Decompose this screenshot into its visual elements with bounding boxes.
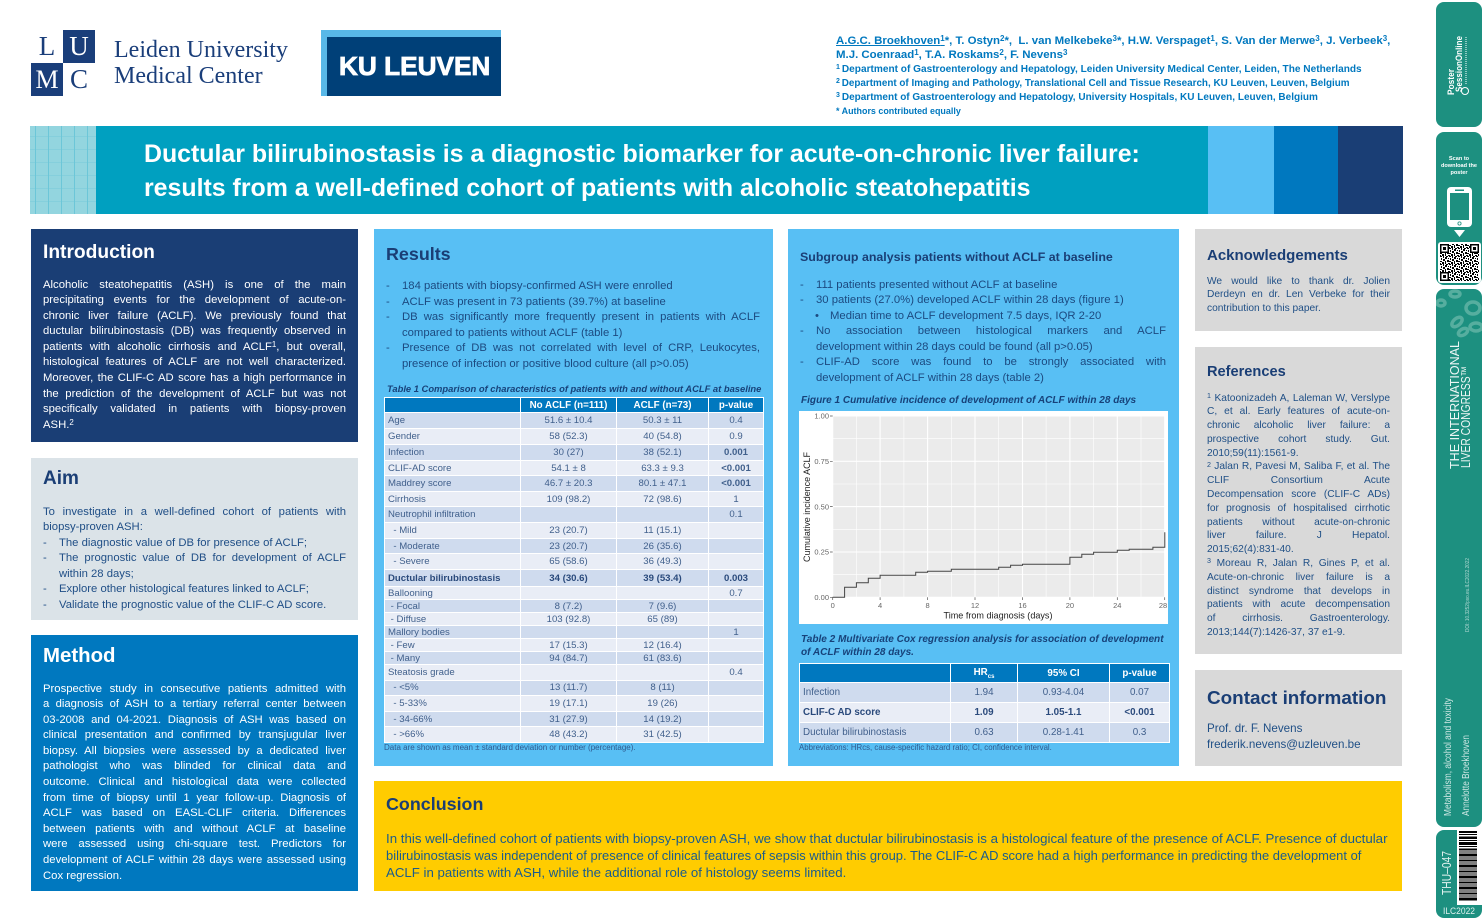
logo: LUMC: Leiden University <box>114 37 288 63</box>
panel: acknowledgements <box>1195 229 1402 331</box>
text: subgroup bullets: - <box>800 356 804 368</box>
text: reference list: for prognosis of hospitalised cirrhotic <box>1207 503 1390 514</box>
sidebar block: congress and session: LIVER CONGRESS™ <box>1459 366 1473 468</box>
text: results bullets: compared to patients without ACLF (table 1) <box>402 327 622 339</box>
sidebar block: congress and session: Annelotte Broekhoven <box>1461 735 1472 816</box>
text: method body: were assessed using chi-square test. Predictors for <box>43 838 346 850</box>
axis tick labels: 4 <box>878 601 882 610</box>
table 1: 0.9 <box>729 431 743 442</box>
sidebar: congress strip <box>1436 2 1482 918</box>
table 1: Ballooning <box>388 588 433 599</box>
panel: contact information <box>1195 670 1402 766</box>
table 2: Ductular bilirubinostasis <box>803 727 906 738</box>
panel: references <box>1195 347 1402 654</box>
panel: conclusion <box>374 781 1402 891</box>
text: results bullets: - <box>386 311 390 323</box>
text: results bullets: - <box>386 280 390 292</box>
authors and affiliations: 3 Department of Gastroenterology and Hepatology, University Hospitals, KU Leuven, Leuven, Belgium <box>836 92 1318 103</box>
table 2: 95% CI <box>1047 668 1080 678</box>
text: reference list: chronic alcoholic liver failure: a <box>1207 420 1390 431</box>
authors and affiliations: 1 Department of Gastroenterology and Hepatology, Leiden University Medical Center, Leiden, The Netherlands <box>836 64 1362 75</box>
text: aim body: Explore other histological features linked to ACLF; <box>59 583 309 595</box>
heading: results: Results <box>386 244 451 264</box>
text: method body: Cox regression. <box>43 870 122 882</box>
heading: subgroup analysis: Subgroup analysis patients without ACLF at baseline <box>800 250 1113 264</box>
caption: table 1: Table 1 Comparison of characteristics of patients with and without ACLF at baseline <box>387 383 761 394</box>
table 1: 1 <box>733 494 739 505</box>
logo: LUMC: L <box>39 31 55 61</box>
sidebar block: poster number and barcode <box>1436 830 1482 918</box>
text: reference list: of cirrhosis. Gastroenterology. <box>1207 613 1390 624</box>
text: aim body: - <box>43 599 47 611</box>
table 1: 103 (92.8) <box>547 614 590 625</box>
text: method body: outcome. Clinical and histological data were collected <box>43 776 346 788</box>
table 1: 11 (15.1) <box>644 525 681 536</box>
table 1: No ACLF (n=111) <box>530 400 607 411</box>
panel: introduction <box>31 229 358 442</box>
icon: down arrow <box>1454 230 1465 237</box>
axis tick labels: 0.00 <box>814 593 829 602</box>
caption: table 2: Table 2 Multivariate Cox regression analysis for association of development <box>801 634 1164 645</box>
table 1: 63.3 ± 9.3 <box>641 463 684 474</box>
text: method body: development of ACLF within 28 days were assessed using <box>43 854 346 866</box>
text: aim body: biopsy-proven ASH: <box>43 521 143 533</box>
table 1: Infection <box>388 447 424 458</box>
text: method body: biopsy. All biopsies were assessed by a dedicated liver <box>43 745 346 757</box>
table 2: 0.28-1.41 <box>1043 727 1084 738</box>
text: conclusion body <box>386 830 1388 880</box>
table 1: 30 (27) <box>553 447 584 458</box>
axis tick labels: 0.75 <box>814 457 829 466</box>
text: subgroup bullets: • <box>815 310 819 322</box>
heading: references: References <box>1207 364 1286 380</box>
barcode <box>1459 831 1477 900</box>
table 1: Neutrophil infiltration <box>388 509 475 520</box>
text: results bullets: presence of infection or positive blood culture (all p>0.05) <box>402 358 689 370</box>
table 1: - Focal <box>391 601 420 612</box>
table 1: p-value <box>719 400 753 411</box>
table 1: 65 (58.6) <box>549 556 588 567</box>
heading: contact information: Contact information <box>1207 688 1386 709</box>
QR code <box>1438 242 1481 283</box>
table 1: 72 (98.6) <box>643 494 682 505</box>
chart: cumulative incidence <box>799 411 1168 624</box>
text: method body: Prospective study in consecutive patients admitted with <box>43 682 346 694</box>
text: reference list: 2013;144(7):1426-37, 37 e1-9. <box>1207 627 1345 638</box>
axis tick labels <box>814 412 1167 610</box>
text: subgroup bullets: 111 patients presented without ACLF at baseline <box>816 278 1057 290</box>
text: reference list: Decompensation score (CLIF-C ADs) <box>1207 489 1390 500</box>
table 1: Cirrhosis <box>388 494 426 505</box>
text: method body: from time of biopsy until 1 year follow-up. Diagnosis of <box>43 792 346 804</box>
axis tick labels: 0.50 <box>814 502 829 511</box>
text: results bullets: DB was significantly more frequently present in patients with ACLF <box>402 311 760 323</box>
text: acknowledgements body: contribution to this paper. <box>1207 303 1321 314</box>
table 1: 19 (17.1) <box>549 698 588 709</box>
table 1: - Mild <box>393 525 417 536</box>
sidebar block: congress and session <box>1436 289 1482 827</box>
heading: acknowledgements: Acknowledgements <box>1207 247 1348 264</box>
heading: introduction: Introduction <box>43 242 155 263</box>
sidebar block: poster session online <box>1436 2 1482 127</box>
sidebar block: poster session online: Poster <box>1446 69 1456 95</box>
text: results bullets: - <box>386 342 390 354</box>
table 1: - Moderate <box>393 541 440 552</box>
logo: LUMC: M <box>35 65 59 94</box>
text: reference list: patients without acute-on-chronic <box>1207 517 1390 528</box>
text: introduction body: Alcoholic steatohepatitis (ASH) is one of the main <box>43 278 346 290</box>
table 1: <0.001 <box>721 463 751 474</box>
text: method body: between patients with and without ACLF at baseline <box>43 823 346 835</box>
text: reference list: prospective cohort study. Gut. <box>1207 434 1390 445</box>
axis tick labels: 1.00 <box>814 412 829 421</box>
text: aim body: - <box>43 583 47 595</box>
axis tick labels: 16 <box>1018 601 1027 610</box>
text: subgroup bullets: - <box>800 325 804 337</box>
axis tick labels: 28 <box>1159 601 1167 610</box>
table 1: - <5% <box>393 682 419 693</box>
authors and affiliations: M.J. Coenraad1, T.A. Roskams2, F. Nevens3 <box>836 48 1067 61</box>
text: acknowledgements body: We would like to thank dr. Jolien <box>1207 276 1390 286</box>
sidebar block: scan to download: Scan to <box>1449 156 1470 162</box>
logo: LUMC <box>31 30 288 96</box>
axis tick labels: 12 <box>971 601 979 610</box>
table 1: Steatosis grade <box>388 667 455 678</box>
sidebar block: scan to download: poster <box>1450 170 1468 176</box>
table 1: 39 (53.4) <box>643 573 682 584</box>
table 1: 38 (52.1) <box>643 447 682 458</box>
sidebar block: scan to download: download the <box>1441 163 1477 169</box>
axis tick labels: 0 <box>831 601 835 610</box>
table 1: 23 (20.7) <box>549 525 588 536</box>
text: introduction body: Moreover, the CLIF-C AD score has a high performance in <box>43 372 346 384</box>
table 2: p-value <box>1122 668 1157 678</box>
text: reference list: patients with acute decompensation <box>1207 599 1390 610</box>
axis tick labels: 20 <box>1066 601 1074 610</box>
logo: KU Leuven <box>321 30 501 96</box>
sidebar block: scan to download <box>1436 132 1482 285</box>
sidebar block: congress and session: THE INTERNATIONAL <box>1448 341 1462 469</box>
table 1: - Diffuse <box>391 614 426 625</box>
text: subgroup bullets: No association between histological markers and ACLF <box>816 325 1166 337</box>
text: introduction body: ductular bilirubinostasis (DB) was frequently observed in <box>43 325 346 337</box>
table 2: Infection <box>803 687 840 698</box>
text: acknowledgements body <box>1207 276 1390 314</box>
table 1: CLIF-AD score <box>388 463 451 474</box>
text: introduction body <box>43 278 346 431</box>
authors and affiliations: * Authors contributed equally <box>836 106 961 116</box>
text: reference list: Acute-on-chronic liver failure is a <box>1207 572 1390 583</box>
panel: subgroup analysis <box>788 229 1179 766</box>
logo: KU Leuven: KU LEUVEN <box>339 51 490 81</box>
text: subgroup bullets: CLIF-AD score was found to be strongly associated with <box>816 356 1166 368</box>
table 1: 7 (9.6) <box>649 601 676 612</box>
text: results bullets: 184 patients with biopsy-confirmed ASH were enrolled <box>402 280 673 292</box>
text: subgroup bullets: - <box>800 278 804 290</box>
table 1: 31 (27.9) <box>549 714 588 725</box>
text: results bullets: - <box>386 296 390 308</box>
text: conclusion body: ACLF in patients with ASH, while the additional role of histology seems limited. <box>386 865 846 880</box>
table 1: 1 <box>733 627 739 638</box>
caption: table 2 <box>801 634 1164 658</box>
table 1: 0.4 <box>729 415 743 426</box>
text: subgroup bullets: Median time to ACLF development 7.5 days, IQR 2-20 <box>830 310 1101 322</box>
table 1: 34 (30.6) <box>549 573 588 584</box>
table 2: 0.63 <box>974 727 994 738</box>
table 1: 26 (35.6) <box>643 541 682 552</box>
footnote: table 1: Data are shown as mean ± standard deviation or number (percentage). <box>384 743 636 752</box>
footnote: table 2: Abbreviations: HRcs, cause-specific hazard ratio; CI, confidence interval. <box>799 743 1052 752</box>
table 1: 80.1 ± 47.1 <box>639 478 686 489</box>
text: reference list: 2010;59(11):1561-9. <box>1207 448 1299 459</box>
table 1: 19 (26) <box>647 698 678 709</box>
text: reference list: 1 Katoonizadeh A, Laleman W, Verslype <box>1207 392 1390 404</box>
table 2: 0.93-4.04 <box>1043 687 1084 698</box>
table 1: - Few <box>391 640 415 651</box>
table 2: HRcs <box>974 667 994 679</box>
text: reference list: 2015;62(4):831-40. <box>1207 544 1294 555</box>
table 2: 1.09 <box>974 707 994 718</box>
heading: aim: Aim <box>43 468 79 489</box>
incidence step curve <box>833 532 1165 597</box>
text: subgroup bullets: - <box>800 294 804 306</box>
authors and affiliations <box>836 34 1390 116</box>
logo: LUMC: U <box>69 31 89 61</box>
table 1: 61 (83.6) <box>643 653 682 664</box>
panel: results <box>374 229 773 766</box>
table 1: 109 (98.2) <box>547 494 590 505</box>
text: introduction body: chronic liver failure (ACLF). We previously found that <box>43 310 346 322</box>
text: method body: ACLF was based on EASL-CLIF criteria. Differences <box>43 807 346 819</box>
sidebar block: congress and session: Metabolism, alcohol and toxicity <box>1443 698 1454 816</box>
table 1: - 34-66% <box>393 714 432 725</box>
text: aim body <box>43 506 346 611</box>
text: contact details: frederik.nevens@uzleuven.be <box>1207 738 1361 751</box>
table 2 <box>799 663 1170 743</box>
text: results bullets: Presence of DB was not correlated with level of CRP, Leukocytes, <box>402 342 760 354</box>
table 1: 0.7 <box>729 588 743 599</box>
text: subgroup bullets: development of ACLF within 28 days (table 2) <box>816 372 1044 384</box>
authors and affiliations: 2 Department of Imaging and Pathology, Translational Cell and Tissue Research, KU Leuven, Leuven, Belgium <box>836 78 1350 89</box>
table 1: 0.003 <box>724 573 748 584</box>
heading: method: Method <box>43 645 115 667</box>
sidebar block: poster number and barcode: THU–047 <box>1439 851 1454 895</box>
table 1: - Many <box>391 653 420 664</box>
chart: cumulative incidence: Cumulative incidence ACLF <box>802 452 812 562</box>
text: method body: clinical presentation and confirmed by transjugular liver <box>43 729 346 741</box>
table 2: 0.07 <box>1130 687 1149 698</box>
table 1: 0.1 <box>729 509 743 520</box>
text: reference list: 3 Moreau R, Jalan R, Gines P, et al. <box>1207 557 1390 569</box>
sidebar block: poster number and barcode: ILC2022 <box>1443 906 1475 916</box>
text: reference list: 2 Jalan R, Pavesi M, Saliba F, et al. The <box>1207 461 1390 472</box>
table 1: Mallory bodies <box>388 627 450 638</box>
table 1: 48 (43.2) <box>549 729 588 740</box>
table 1: 36 (49.3) <box>643 556 682 567</box>
text: subgroup bullets <box>800 278 1166 384</box>
table 2: <0.001 <box>1124 707 1155 718</box>
text: introduction body: precipitating events for the development of acute-on- <box>43 294 346 306</box>
table 1: 94 (84.7) <box>549 653 588 664</box>
panel: method <box>31 635 358 891</box>
table 1: 0.001 <box>724 447 748 458</box>
sidebar block: poster session online: SessionOnline <box>1454 36 1464 92</box>
text: acknowledgements body: Derdeyn en dr. Len Verbeke for their <box>1207 289 1390 300</box>
table 1: 54.1 ± 8 <box>551 463 586 474</box>
caption: table 2: of ACLF within 28 days. <box>801 647 914 658</box>
table 2: CLIF-C AD score <box>803 707 880 718</box>
text: reference list: liver failure. J Hepatol. <box>1207 530 1390 541</box>
text: introduction body: ASH.2 <box>43 418 74 431</box>
table 2: 1.05-1.1 <box>1046 707 1081 718</box>
table 1: Ductular bilirubinostasis <box>388 573 500 584</box>
decorative rings <box>1437 291 1482 337</box>
axis tick labels: 8 <box>926 601 930 610</box>
table 1: 65 (89) <box>647 614 678 625</box>
table 1: 0.4 <box>729 667 743 678</box>
text: contact details <box>1207 722 1361 751</box>
table 1: 50.3 ± 11 <box>643 415 682 426</box>
text: results bullets <box>386 280 760 370</box>
table 1: - 5-33% <box>393 698 427 709</box>
icon: phone <box>1447 187 1472 227</box>
text: reference list: distinct syndrome that develops in <box>1207 586 1390 597</box>
table 1: 12 (16.4) <box>643 640 682 651</box>
text: results bullets: ACLF was present in 73 patients (39.7%) at baseline <box>402 296 666 308</box>
table 1: 17 (15.3) <box>549 640 588 651</box>
text: aim body: The prognostic value of DB for development of ACLF <box>59 552 346 564</box>
text: aim body: The diagnostic value of DB for presence of ACLF; <box>59 537 307 549</box>
table 2: 1.94 <box>974 687 994 698</box>
text: aim body: - <box>43 537 47 549</box>
text: introduction body: histological features of ACLF are not well characterized. <box>43 356 346 368</box>
text: conclusion body: bilirubinostasis was independent of presence of clinical features of sepsis within this group. The CLIF-C AD score had a high performance in predicting the development of <box>386 848 1361 863</box>
table 1: 31 (42.5) <box>643 729 682 740</box>
text: conclusion body: In this well-defined cohort of patients with biopsy-proven ASH, we show that ductular bilirubinostasis is a histological feature of the presence of ACLF. Presence of ductular <box>386 830 1388 846</box>
table 1: 8 (7.2) <box>555 601 582 612</box>
table 1: 13 (11.7) <box>550 682 587 693</box>
table 1 <box>384 397 764 743</box>
authors and affiliations: A.G.C. Broekhoven1*, T. Ostyn2*, L. van Melkebeke3*, H.W. Verspaget1, S. Van der Merwe3, J. Verbeek3, <box>836 34 1390 47</box>
text: method body <box>43 682 346 882</box>
text: aim body: - <box>43 552 47 564</box>
text: method body: 03-2008 and 04-2021. Diagnosis of ASH was based on <box>43 714 346 726</box>
title banner <box>30 126 1403 214</box>
axis titles: Time from diagnosis (days) <box>944 610 1052 620</box>
table 1: - >66% <box>393 729 424 740</box>
table 1: 14 (19.2) <box>643 714 682 725</box>
sidebar block: congress and session: DOI: 10.3252/pso.eu.ILC2022.2022 <box>1465 558 1471 632</box>
table 1: <0.001 <box>721 478 751 489</box>
table 1: 58 (52.3) <box>549 431 588 442</box>
table 1: 8 (11) <box>650 682 675 693</box>
table 1: Age <box>388 415 405 426</box>
table 2: 0.3 <box>1133 727 1146 738</box>
table 1: 40 (54.8) <box>643 431 682 442</box>
logo: LUMC: Medical Center <box>114 63 263 89</box>
text: aim body: within 28 days; <box>59 568 134 580</box>
axis tick labels: 24 <box>1113 601 1121 610</box>
text: subgroup bullets: 30 patients (27.0%) developed ACLF within 28 days (figure 1) <box>816 294 1124 306</box>
title banner: Ductular bilirubinostasis is a diagnostic biomarker for acute-on-chronic liver failure: <box>144 140 1140 168</box>
caption: figure 1: Figure 1 Cumulative incidence of development of ACLF within 28 days <box>801 395 1136 406</box>
table 1: 46.7 ± 20.3 <box>545 478 592 489</box>
text: subgroup bullets: development within 28 days could be found (all p>0.05) <box>816 341 1093 353</box>
table 1: 23 (20.7) <box>549 541 588 552</box>
table 1: Gender <box>388 431 420 442</box>
table 1: ACLF (n=73) <box>634 400 691 411</box>
table 1: - Severe <box>393 556 430 567</box>
text: method body: pathologist who was blinded for clinical data and <box>43 760 346 772</box>
table 1: 51.6 ± 10.4 <box>545 415 592 426</box>
text: reference list: CLIF Consortium Acute <box>1207 475 1390 486</box>
text: contact details: Prof. dr. F. Nevens <box>1207 722 1302 735</box>
table 1: Maddrey score <box>388 478 451 489</box>
text: introduction body: patients with alcoholic cirrhosis and ACLF1, but overall, <box>43 340 346 353</box>
text: reference list <box>1207 392 1390 638</box>
text: aim body: Validate the prognostic value of the CLIF-C AD score. <box>59 599 326 611</box>
title banner: results from a well-defined cohort of patients with alcoholic steatohepatitis <box>144 174 1031 202</box>
text: introduction body: specifically validated in patients with biopsy-proven <box>43 403 346 415</box>
logo: LUMC: C <box>70 64 88 94</box>
heading: conclusion: Conclusion <box>386 794 483 814</box>
text: introduction body: the prediction of the development of ACLF but was not <box>43 388 346 400</box>
text: reference list: C, et al. Early features of acute-on- <box>1207 406 1390 417</box>
text: method body: a diagnosis of ASH to a tertiary referral center between <box>43 698 346 710</box>
panel: aim <box>31 458 358 620</box>
axis tick labels: 0.25 <box>814 548 829 557</box>
text: aim body: To investigate in a well-defined cohort of patients with <box>43 506 346 518</box>
